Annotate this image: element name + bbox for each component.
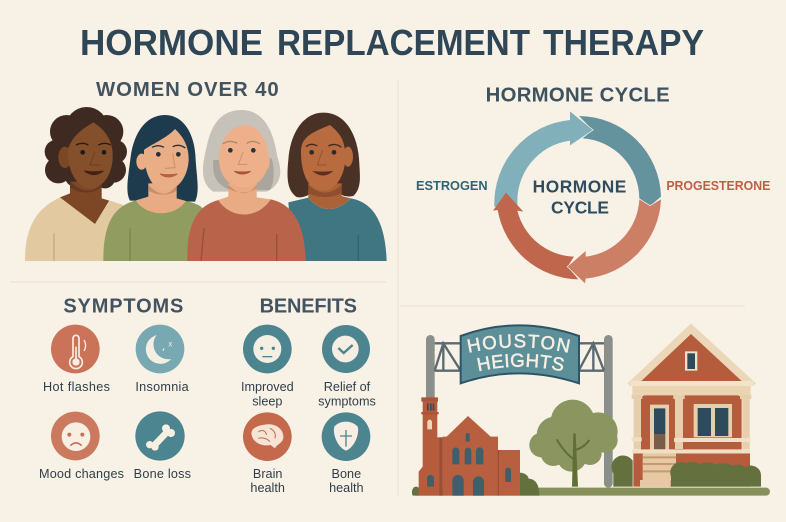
item: hot flashes bbox=[43, 325, 110, 394]
sign: houston heights: HOUSTON bbox=[467, 334, 570, 353]
arrow: rust bbox=[493, 193, 578, 279]
figure: woman 4 in teal bbox=[288, 113, 387, 261]
arrow: estrogen, light teal bbox=[494, 111, 593, 207]
item: bone health: health bbox=[329, 481, 364, 495]
item: brain health: health bbox=[250, 481, 285, 495]
panel: women over 40 bbox=[25, 79, 387, 261]
house bbox=[611, 323, 761, 487]
arrow: salmon bbox=[568, 199, 661, 283]
item: improved sleep: sleep bbox=[252, 395, 282, 409]
heading: symptoms: SYMPTOMS bbox=[63, 296, 183, 318]
item: bone loss bbox=[134, 411, 191, 481]
item: insomnia: Insomnia bbox=[135, 380, 190, 394]
tree bbox=[529, 400, 618, 487]
sign: houston heights bbox=[460, 324, 580, 385]
heading: hormone cycle: HORMONE CYCLE bbox=[486, 84, 670, 106]
item: brain health: Brain bbox=[253, 467, 282, 481]
item: bone loss: Bone loss bbox=[134, 467, 191, 481]
item: hot flashes: Hot flashes bbox=[43, 380, 110, 394]
item: relief of symptoms: symptoms bbox=[318, 395, 376, 409]
heading: benefits: BENEFITS bbox=[260, 296, 357, 318]
item: bone health bbox=[322, 412, 370, 495]
item: improved sleep bbox=[241, 325, 294, 409]
item: improved sleep: Improved bbox=[241, 380, 294, 394]
item: insomnia bbox=[135, 325, 190, 394]
arrow: dark teal bbox=[579, 116, 661, 206]
sign: houston heights: HEIGHTS bbox=[477, 353, 564, 372]
title: THERAPY bbox=[543, 22, 704, 63]
item: bone health: Bone bbox=[332, 467, 361, 481]
title: REPLACEMENT bbox=[277, 22, 530, 63]
item: relief of symptoms bbox=[318, 325, 376, 409]
ground bbox=[412, 488, 770, 496]
item: insomnia: x bbox=[168, 339, 172, 348]
panel: houston heights scene bbox=[412, 324, 770, 496]
panel: symptoms and benefits bbox=[39, 296, 376, 495]
arch posts and truss bbox=[426, 335, 613, 488]
title: HORMONE bbox=[80, 22, 263, 63]
item: mood changes: Mood changes bbox=[39, 467, 124, 481]
label: estrogen: ESTROGEN bbox=[416, 178, 488, 193]
figure: woman 2 in green bbox=[103, 115, 203, 261]
figure: woman 1 in cream bbox=[25, 107, 127, 261]
item: brain health bbox=[243, 412, 292, 495]
center label: HORMONE bbox=[533, 177, 626, 197]
church building bbox=[412, 397, 539, 496]
center label: CYCLE bbox=[551, 197, 609, 217]
item: relief of symptoms: Relief of bbox=[324, 380, 371, 394]
heading: women over 40: WOMEN OVER 40 bbox=[96, 79, 279, 101]
figure: woman 3 in rust bbox=[187, 110, 306, 261]
panel: hormone cycle bbox=[416, 84, 771, 283]
label: progesterone: PROGESTERONE bbox=[666, 178, 771, 193]
item: mood changes bbox=[39, 412, 124, 481]
